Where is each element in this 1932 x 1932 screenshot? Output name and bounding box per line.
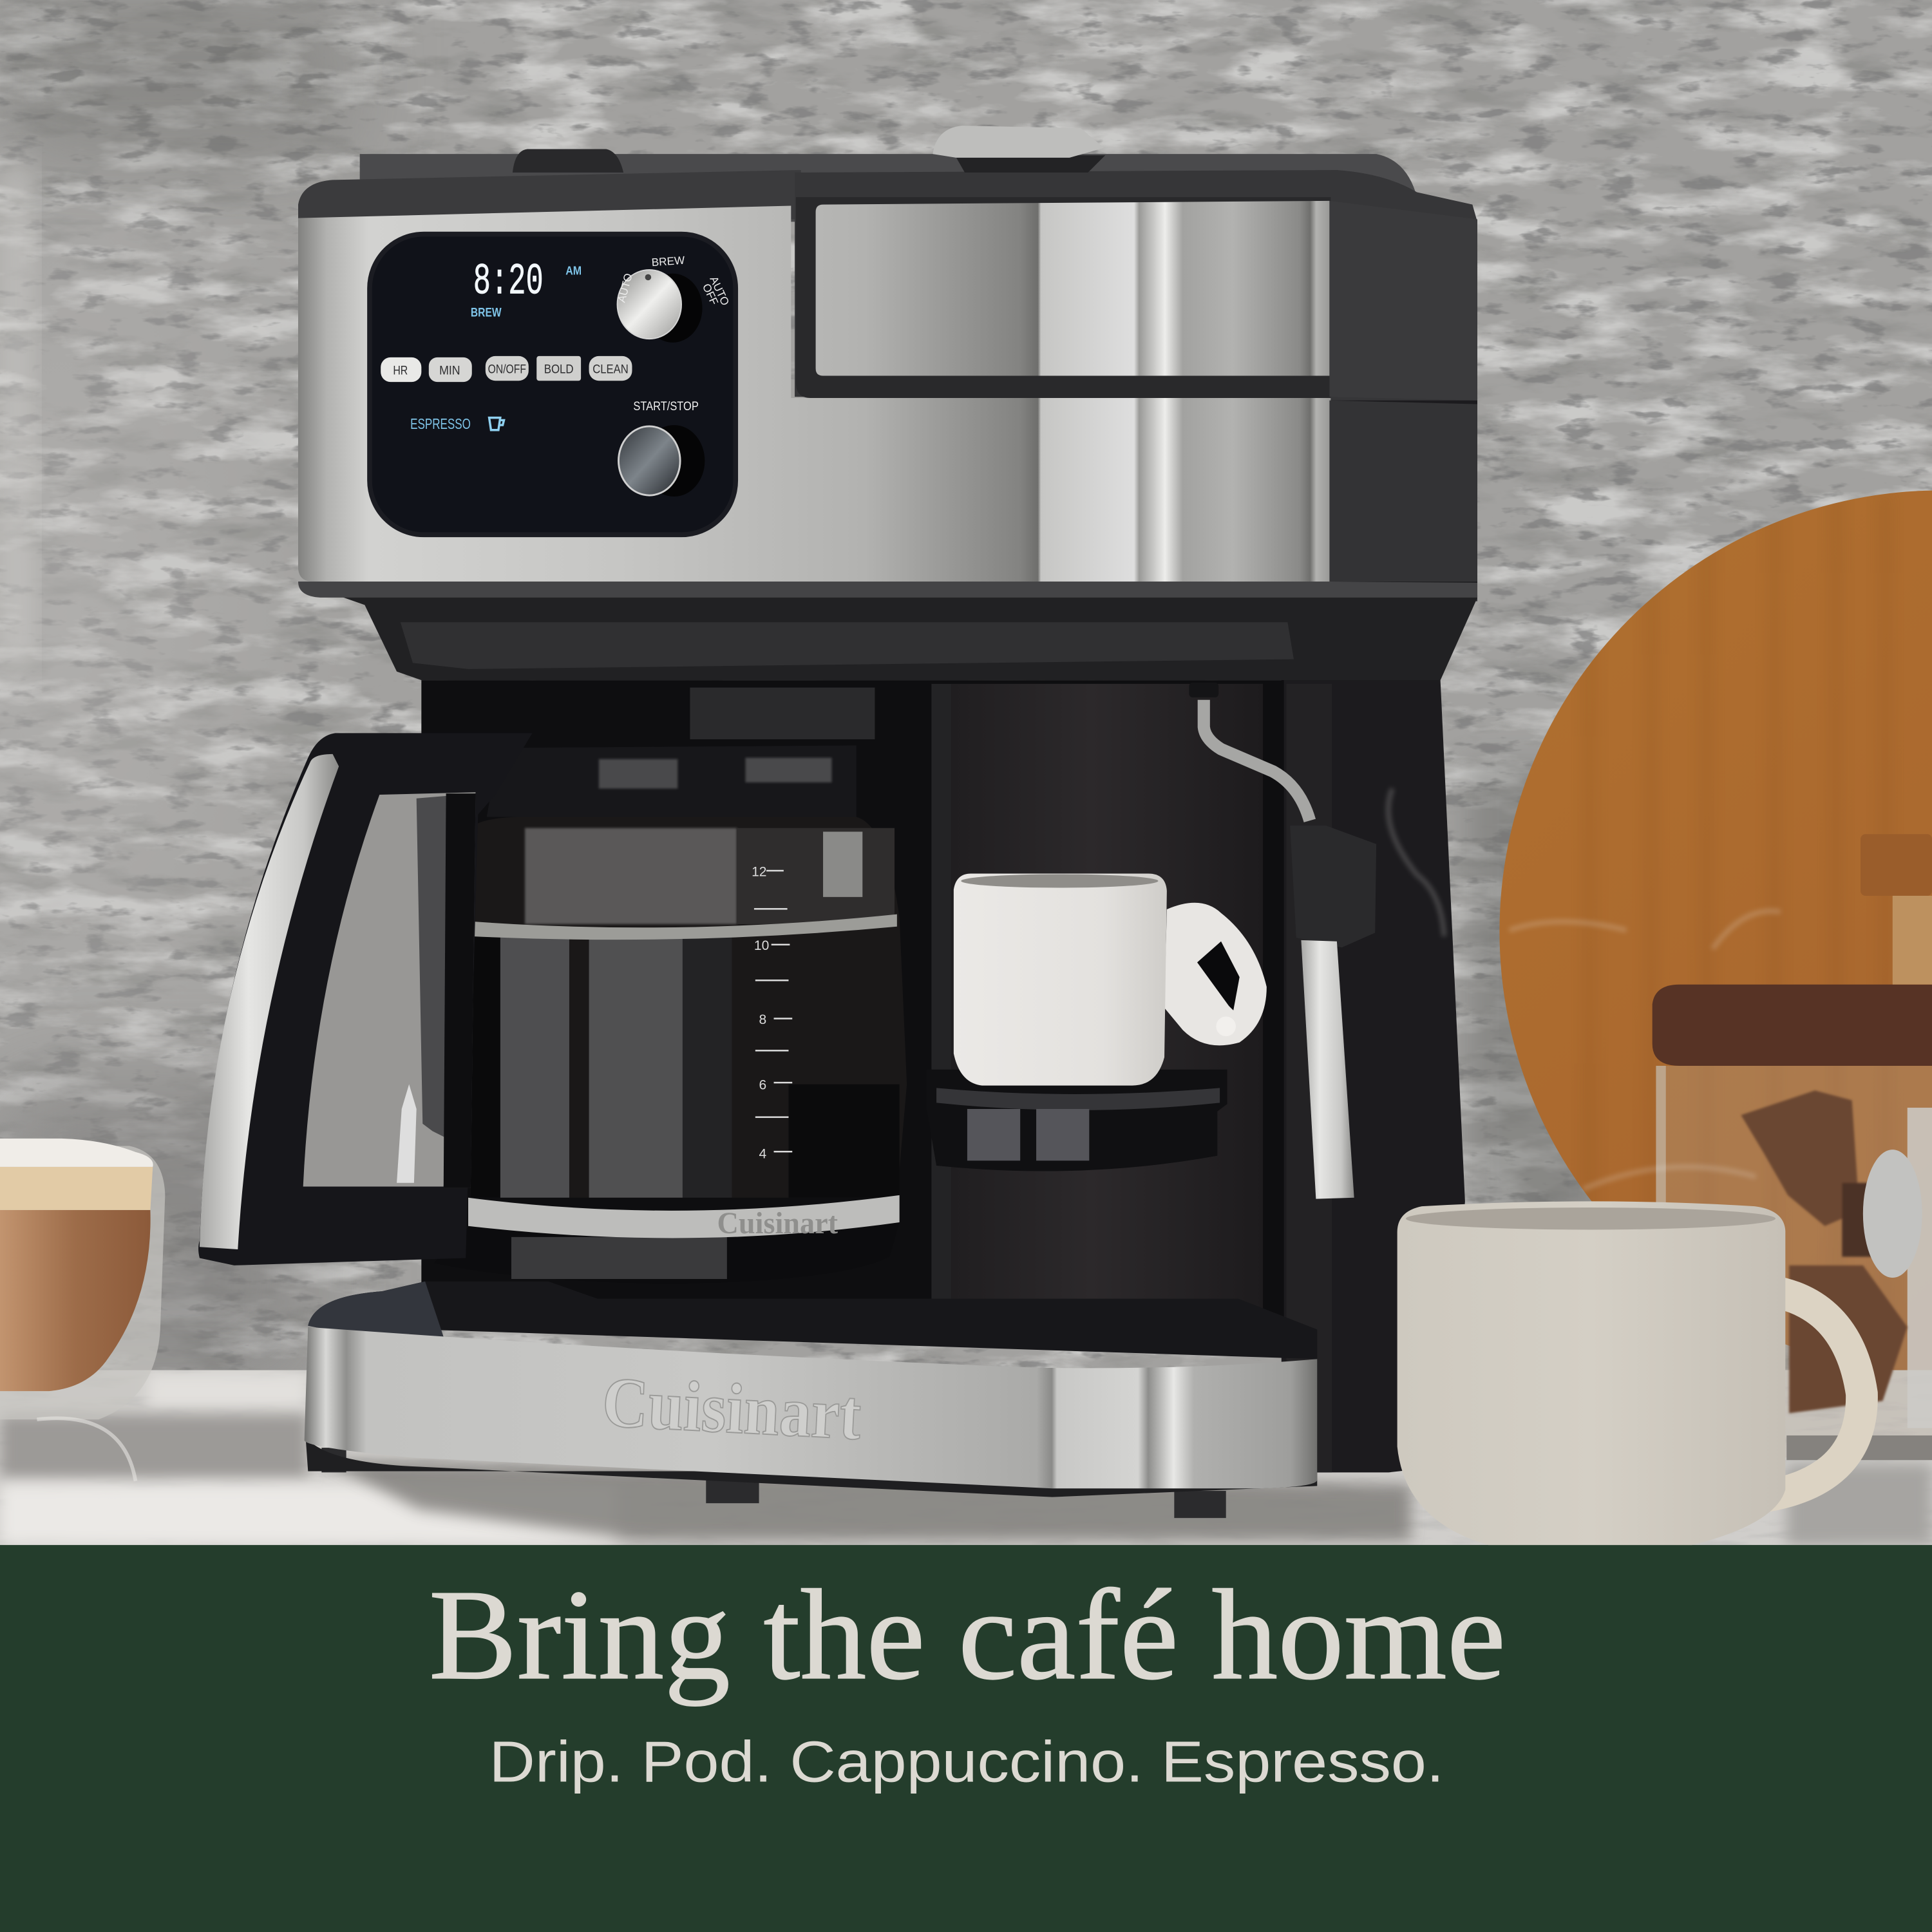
function buttons: CLEAN (592, 363, 629, 377)
underside shelf (298, 582, 1477, 680)
start stop dial (618, 425, 705, 497)
function buttons: BOLD (544, 363, 574, 377)
jar lid (1653, 985, 1932, 1066)
machine side panel (1329, 201, 1477, 401)
steam wand (1204, 700, 1376, 1199)
carafe scale: 6 (759, 1077, 766, 1092)
heading: Bring the café home (429, 1564, 1506, 1707)
rising steam (1388, 788, 1781, 1189)
espresso cup (954, 874, 1267, 1086)
reflections in coffee (500, 931, 569, 1198)
function buttons: ON/OFF (488, 363, 526, 377)
carafe scale (752, 864, 792, 1161)
carafe glass (433, 746, 907, 1284)
carafe scale: 10 (754, 938, 769, 953)
carafe handle (198, 733, 533, 1265)
control panel (370, 234, 735, 535)
start stop label: START/STOP (633, 400, 699, 413)
concrete wall background (0, 0, 1932, 1380)
carafe scale: 8 (759, 1012, 766, 1027)
dial labels: BREW (651, 254, 686, 269)
carafe lid (487, 746, 857, 817)
subheading: Drip. Pod. Cappuccino. Espresso. (489, 1730, 1444, 1795)
dial labels: AUTO (707, 274, 732, 307)
espresso label: ESPRESSO (410, 415, 471, 432)
capsules (1741, 1090, 1908, 1414)
background wooden block (1861, 834, 1932, 896)
mode dial (618, 270, 703, 343)
carafe lower glass (433, 1222, 900, 1284)
espresso station back panel (931, 683, 1332, 1472)
foreground mug (1397, 1201, 1862, 1545)
dial labels: AUTO (615, 272, 635, 304)
base brand: Cuisinart (600, 1363, 863, 1455)
countertop (0, 1370, 1932, 1545)
carafe scale: 4 (759, 1146, 767, 1161)
dial labels: OFF (700, 281, 721, 307)
green caption band (0, 1545, 1932, 1932)
cappuccino glass (0, 1139, 165, 1481)
base feet (321, 1448, 1226, 1518)
wooden cutting board (1499, 490, 1932, 1372)
reservoir drawer (796, 197, 1331, 398)
stainless upper panel (298, 206, 1331, 582)
carafe band (468, 1195, 900, 1238)
function buttons: HR (393, 365, 408, 378)
clock display: 8:20 (473, 256, 544, 307)
coffee capsule jar (1653, 834, 1932, 1460)
machine base (305, 1282, 1317, 1518)
drip tray stand (927, 1070, 1227, 1171)
dial labels (615, 254, 732, 307)
silver capsule lid (1863, 1150, 1922, 1278)
coffee level line (475, 914, 897, 940)
carafe scale: 12 (752, 864, 766, 879)
function buttons (381, 356, 632, 382)
reflections above coffee (525, 828, 737, 924)
brew label: BREW (471, 307, 502, 320)
machine rear body (1282, 397, 1477, 1472)
handle chrome strip (200, 754, 339, 1249)
background glass (1893, 896, 1932, 985)
cup icon (489, 418, 504, 430)
AM label: AM (565, 265, 582, 278)
carafe brand: Cuisinart (717, 1206, 838, 1240)
function buttons: MIN (439, 365, 460, 378)
machine lid (298, 126, 1477, 401)
handle window (303, 792, 476, 1186)
brew chamber back (421, 680, 1284, 1321)
machine side panel lower (1329, 401, 1477, 601)
